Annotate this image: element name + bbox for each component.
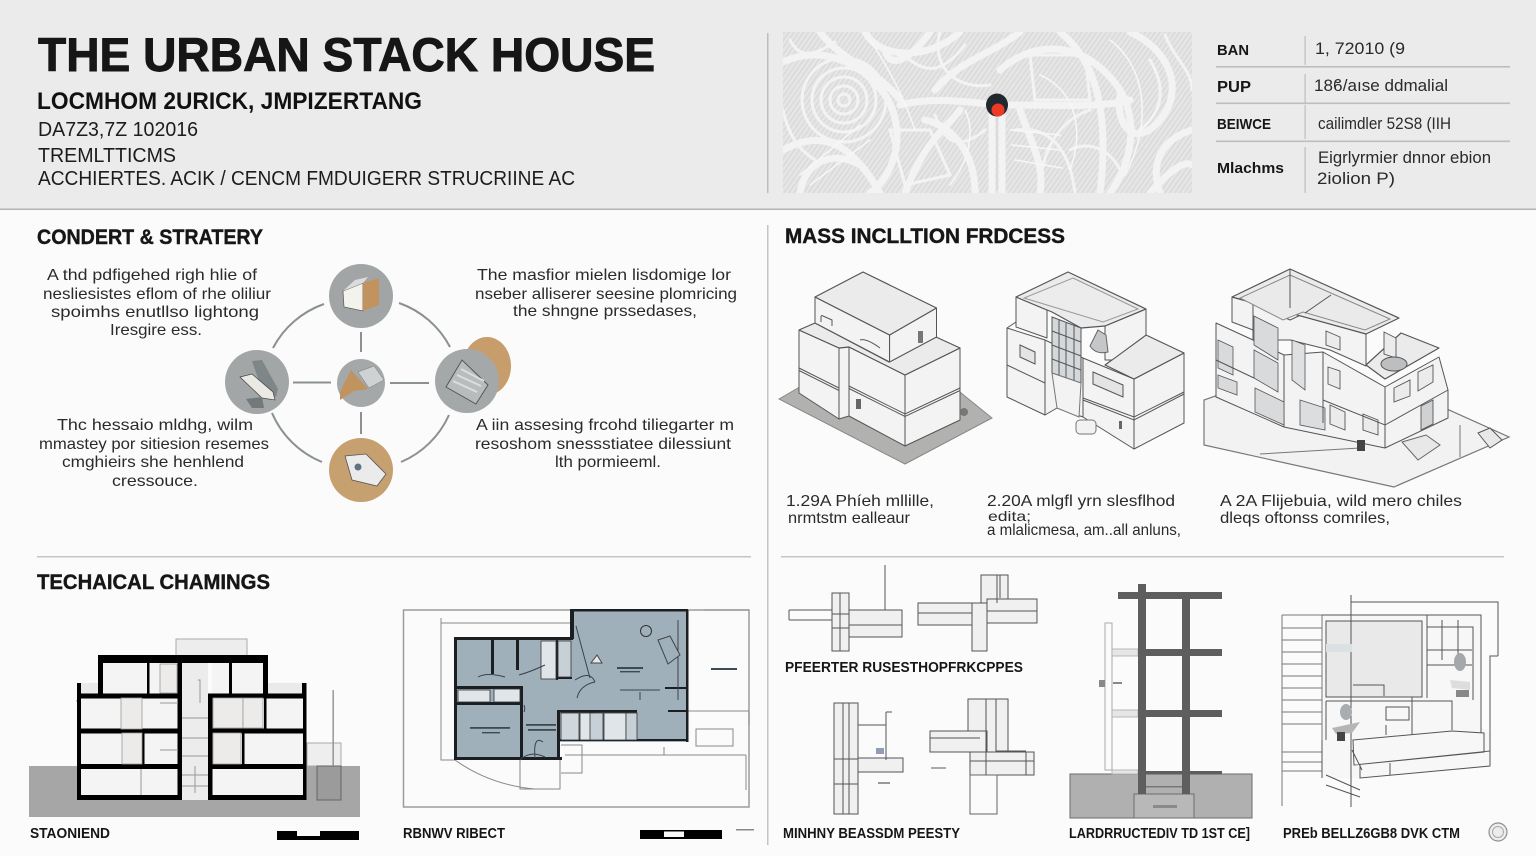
project data table: 2iolion P): [1317, 169, 1395, 188]
project data table: PUP: [1217, 79, 1251, 96]
map pin: [986, 94, 1008, 190]
divider lines: [37, 225, 1504, 845]
project meta text block: [37, 88, 575, 190]
concept text: top right: [475, 267, 737, 320]
concept text: bottom left: Thc hessaio mldhg, wilm: [57, 417, 253, 434]
caption: step 2: 2.20A mlgfl yrn slesflhod: [987, 493, 1175, 510]
interior section drawing: [1282, 595, 1498, 807]
label: interior: PREb BELLZ6GB8 DVK CTM: [1283, 826, 1460, 842]
concept text: bottom right: [475, 417, 734, 471]
concept text: top left: [43, 267, 272, 339]
caption: step 1: 1.29A Phíeh mllille,: [786, 493, 934, 510]
caption: step 3: A 2A Flijebuia, wild mero chiles: [1220, 493, 1462, 510]
caption: step 3: [1220, 493, 1462, 527]
concept text: bottom left: cmghieirs she henhlend: [62, 454, 244, 471]
icon: paper sheets: [329, 438, 393, 502]
massing model 2: [1007, 272, 1184, 449]
detail: beam to column joint: [789, 565, 902, 651]
concept text: bottom left: mmastey por sitiesion resemes: [39, 436, 269, 453]
heading: technical drawings: TECHAICAL CHAMINGS: [37, 571, 270, 594]
icon: massing cube: [329, 264, 393, 328]
header band: [0, 0, 1536, 210]
icon: facade module with tan blob: [435, 337, 511, 413]
project meta text block: DA7Z3,7Z 102016: [38, 119, 198, 141]
label: mining section: MINHNY BEASSDM PEESTY: [783, 826, 960, 842]
concept text: top right: The masfior mielen lisdomige lor: [477, 267, 732, 284]
concept text: top left: Iresgire ess.: [110, 322, 202, 339]
label: frame: LARDRRUCTEDIV TD 1ST CE]: [1069, 826, 1250, 842]
scale bar: [277, 831, 359, 840]
caption: step 2: edita;: [988, 508, 1031, 524]
project data table: 1, 72010 (9: [1315, 39, 1405, 58]
icon: centre fold: [337, 359, 385, 407]
project data table: [1216, 36, 1510, 193]
caption: step 2: a mlalicmesa, am..all anluns,: [987, 522, 1181, 539]
massing model 3 with site: [1204, 269, 1509, 487]
section drawing: [29, 639, 360, 842]
project data table: Mlachms: [1217, 160, 1284, 177]
project meta text block: LOCMHOM 2URICK, JMPIZERTANG: [37, 88, 422, 115]
concept text: top right: the shngne prssedases,: [513, 303, 697, 320]
project meta text block: TREMLTTICMS: [38, 145, 176, 167]
heading: concept and strategy: CONDERT & STRATERY: [37, 226, 263, 249]
concept text: bottom left: [39, 417, 269, 490]
title: THE URBAN STACK HOUSE: [38, 28, 655, 81]
heading: mass inclusion process: MASS INCLLTION FRDCESS: [785, 225, 1065, 248]
caption: step 1: [786, 493, 934, 527]
project data table: cailimdler 52S8 (IIH: [1318, 114, 1451, 133]
concept text: top left: A thd pdfigehed righ hlie of: [47, 267, 258, 284]
project data table: 18ϐ/aıse ddmalial: [1314, 76, 1448, 95]
concept text: top left: nesliesistes eflom of rhe oliliur: [43, 286, 272, 303]
caption: step 2: [987, 493, 1181, 539]
massing model 1: [779, 272, 992, 464]
icon: structure fragment: [225, 350, 289, 414]
floor plan label and scale bar: RBNWV RIBECT: [403, 826, 505, 842]
detail: column and slab: [834, 703, 903, 814]
location map: [783, 32, 1192, 193]
caption: step 1: nrmtstm ealleaur: [788, 510, 911, 527]
detail: wall corner joint: [918, 575, 1037, 651]
concept text: bottom right: resoshom snessstiatee dilessiunt: [475, 436, 732, 453]
concept text: top right: nseber alliserer seesine plomricing: [475, 286, 737, 303]
concept text: bottom right: lth pormieeml.: [555, 454, 661, 471]
label: prefab details: PFEERTER RUSESTHOPFRKCPPES: [785, 660, 1023, 676]
section drawing: STAONIEND: [30, 826, 110, 842]
floor plan: [404, 609, 749, 807]
icon: stamp: [1489, 823, 1507, 841]
floor plan label and scale bar: [403, 826, 754, 842]
concept text: bottom left: cressouce.: [112, 473, 198, 490]
project data table: Eigrlyrmier dnnor ebion: [1318, 148, 1491, 167]
project data table: BEIWCE: [1217, 116, 1271, 133]
concept diagram: [225, 264, 511, 502]
structural frame drawing: [1070, 584, 1252, 818]
project meta text block: ACCHIERTES. ACIK / CENCM FMDUIGERR STRUCRIINE AC: [38, 168, 575, 190]
caption: step 3: dleqs oftonss comriles,: [1220, 510, 1390, 527]
project data table: BAN: [1217, 42, 1249, 59]
concept text: bottom right: A iin assesing frcohd tiliegarter m: [476, 417, 734, 434]
detail: cross junction: [930, 699, 1034, 814]
concept text: top left: spoimhs enutllso lightong: [51, 304, 259, 321]
